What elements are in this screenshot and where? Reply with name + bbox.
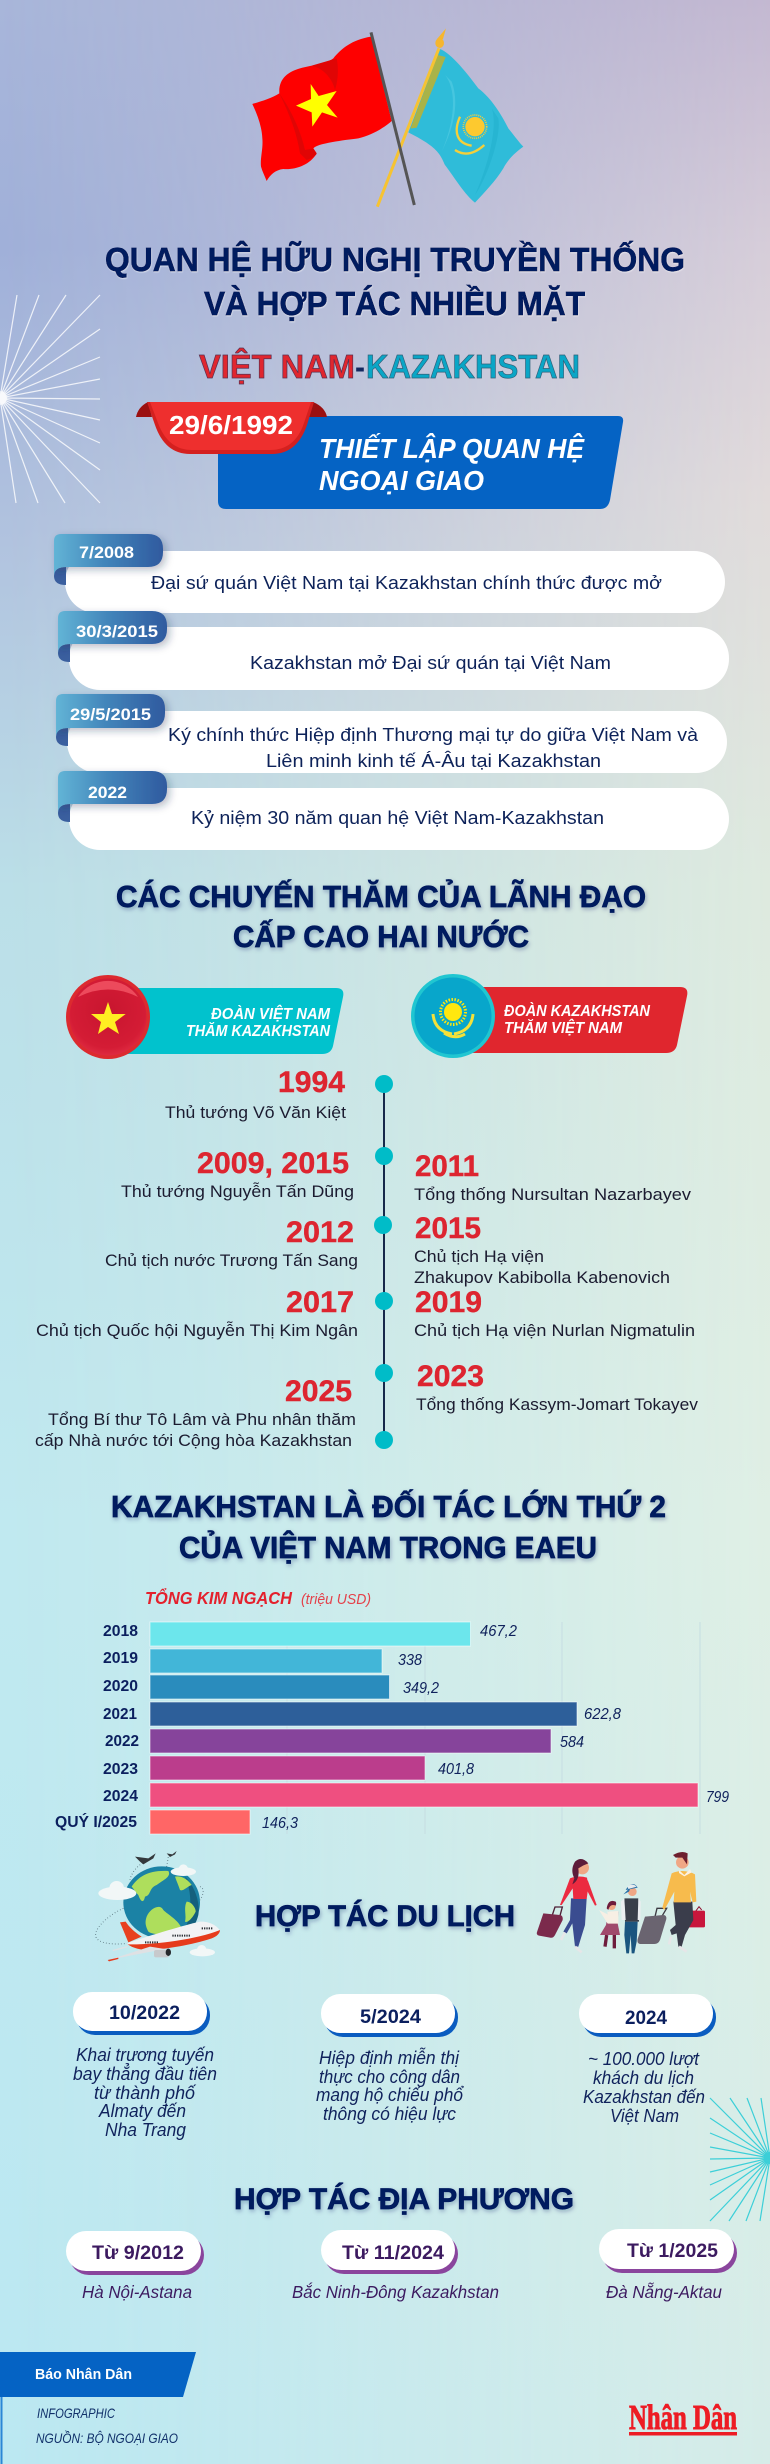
value labels xyxy=(262,1623,729,1832)
heading: high-level visits xyxy=(116,878,646,954)
icon: dark pole xyxy=(371,32,414,205)
heading: local cooperation: HỢP TÁC ĐỊA PHƯƠNG xyxy=(234,2182,574,2216)
description: Khai trương tuyến xyxy=(76,2044,214,2065)
heading: EAEU partner: KAZAKHSTAN LÀ ĐỐI TÁC LỚN THỨ 2 xyxy=(111,1488,666,1524)
visit 2011: 2011 xyxy=(415,1150,479,1183)
visit 2019 xyxy=(414,1286,695,1340)
panel: milestone 2022: Kỷ niệm 30 năm quan hệ Việt Nam-Kazakhstan xyxy=(191,808,604,828)
panel: local Đà Nẵng-Aktau: Đà Nẵng-Aktau xyxy=(606,2282,722,2302)
description xyxy=(583,2048,705,2126)
title xyxy=(105,240,685,322)
description: mang hộ chiếu phổ xyxy=(316,2084,465,2105)
icon: Vietnam flag xyxy=(252,37,392,181)
heading: EAEU partner: CỦA VIỆT NAM TRONG EAEU xyxy=(179,1529,597,1565)
visit 2015: Zhakupov Kabibolla Kabenovich xyxy=(414,1268,670,1287)
bars xyxy=(150,1622,698,1834)
visit 2023: Tổng thống Kassym-Jomart Tokayev xyxy=(416,1395,699,1414)
panel: Vietnam delegation header: THĂM KAZAKHSTAN xyxy=(186,1023,331,1040)
panel: tourism 2024 xyxy=(579,1994,716,2126)
description: khách du lịch xyxy=(593,2067,694,2088)
panel: Vietnam delegation header: ĐOÀN VIỆT NAM xyxy=(211,1005,331,1023)
footer credits: Báo Nhân Dân xyxy=(35,2366,132,2383)
panel: tourism 5/2024 xyxy=(316,1994,465,2124)
visit 2019: Chủ tịch Hạ viện Nurlan Nigmatulin xyxy=(414,1321,695,1340)
value labels: 622,8 xyxy=(584,1706,621,1723)
value labels: 349,2 xyxy=(403,1680,439,1697)
description: Hiệp định miễn thị xyxy=(319,2047,460,2068)
value labels: 799 xyxy=(706,1789,729,1806)
timeline axis xyxy=(374,1075,393,1449)
panel: local Hà Nội-Astana xyxy=(66,2231,204,2302)
chart title: (triệu USD) xyxy=(301,1591,371,1608)
icon: Vietnam badge xyxy=(66,975,150,1059)
panel: milestone 30/3/2015 xyxy=(58,611,729,690)
visit 2012: 2012 xyxy=(286,1216,354,1249)
title: VÀ HỢP TÁC NHIỀU MẶT xyxy=(204,285,585,322)
visit 2011: Tổng thống Nursultan Nazarbayev xyxy=(414,1185,692,1204)
description: thực cho công dân xyxy=(319,2066,460,2087)
icon: globe and airplane xyxy=(96,1851,220,1961)
visit 2023: 2023 xyxy=(417,1360,484,1393)
panel: Kazakhstan delegation header xyxy=(411,974,687,1058)
panel: milestone 30/3/2015: 30/3/2015 xyxy=(76,622,158,641)
panel: milestone 30/3/2015: Kazakhstan mở Đại sứ quán tại Việt Nam xyxy=(250,653,611,673)
chart title: TỔNG KIM NGẠCH xyxy=(145,1587,292,1608)
panel: milestone 29/5/2015 xyxy=(56,694,727,773)
visit 2009, 2015: Thủ tướng Nguyễn Tấn Dũng xyxy=(121,1182,354,1201)
visit 2015 xyxy=(414,1212,670,1287)
visit 2017: 2017 xyxy=(286,1286,354,1319)
footer credits: INFOGRAPHIC xyxy=(37,2405,116,2421)
bar chart: total trade xyxy=(55,1622,729,1834)
heading: high-level visits: CẤP CAO HAI NƯỚC xyxy=(233,918,529,954)
description: Việt Nam xyxy=(610,2105,679,2126)
icon: firework burst left xyxy=(0,295,100,503)
icon: crossed flags xyxy=(252,28,523,207)
visit 2011 xyxy=(414,1150,692,1204)
visit 2009, 2015: 2009, 2015 xyxy=(197,1147,349,1180)
visit 2017: Chủ tịch Quốc hội Nguyễn Thị Kim Ngân xyxy=(36,1321,358,1340)
heading: EAEU partner xyxy=(111,1488,666,1565)
subtitle: Việt Nam-Kazakhstan xyxy=(199,348,580,385)
panel: local Đà Nẵng-Aktau xyxy=(599,2229,737,2302)
value labels: 338 xyxy=(398,1652,422,1669)
visit 2019: 2019 xyxy=(415,1286,482,1319)
panel: milestone 29/5/2015: Liên minh kinh tế Á-Âu tại Kazakhstan xyxy=(266,751,601,771)
girl xyxy=(599,1901,620,1948)
visit 2023 xyxy=(416,1360,699,1414)
year labels: 2022 xyxy=(105,1733,139,1750)
Vietnam visits list xyxy=(35,1066,358,1450)
panel: Vietnam delegation header xyxy=(66,975,343,1059)
visit 2025: 2025 xyxy=(285,1375,352,1408)
year labels: QUÝ I/2025 xyxy=(55,1813,137,1831)
subtitle: Việt Nam-Kazakhstan: KAZAKHSTAN xyxy=(366,348,580,385)
man with bag xyxy=(662,1852,705,1952)
year labels: 2023 xyxy=(103,1761,138,1778)
panel: tourism 2024: 2024 xyxy=(625,2008,667,2029)
panel: tourism 5/2024: 5/2024 xyxy=(360,2007,421,2028)
visit 2025 xyxy=(35,1375,356,1450)
panel: Kazakhstan delegation header: ĐOÀN KAZAKHSTAN xyxy=(504,1003,651,1020)
visit 2012: Chủ tịch nước Trương Tấn Sang xyxy=(105,1251,358,1270)
value labels: 401,8 xyxy=(438,1761,474,1778)
red date ribbon: 29/6/1992 xyxy=(169,410,293,440)
panel: local Bắc Ninh-Đông Kazakhstan: Bắc Ninh-Đông Kazakhstan xyxy=(292,2282,499,2302)
panel: establishment of diplomatic relations xyxy=(136,402,623,509)
year labels: 2024 xyxy=(103,1788,138,1805)
visit 2025: cấp Nhà nước tới Cộng hòa Kazakhstan xyxy=(35,1431,352,1450)
panel: milestone 2022: 2022 xyxy=(88,783,127,802)
panel: milestone 7/2008: 7/2008 xyxy=(79,543,134,562)
chart title xyxy=(145,1587,371,1608)
woman with suitcase xyxy=(537,1859,597,1952)
value labels: 467,2 xyxy=(480,1623,517,1640)
footer credits: NGUỒN: BỘ NGOẠI GIAO xyxy=(36,2429,178,2446)
description xyxy=(316,2047,465,2124)
description: từ thành phố xyxy=(94,2082,197,2103)
footer credits xyxy=(0,2352,196,2464)
value labels: 584 xyxy=(560,1734,584,1751)
description: bay thẳng đầu tiên xyxy=(73,2063,217,2084)
panel: local Hà Nội-Astana: Từ 9/2012 xyxy=(92,2243,184,2264)
year labels: 2021 xyxy=(103,1706,137,1723)
panel: Kazakhstan delegation header: THĂM VIỆT NAM xyxy=(504,1019,623,1037)
panel: tourism 10/2022: 10/2022 xyxy=(109,2003,180,2024)
Kazakhstan visits list xyxy=(414,1150,699,1414)
description: ~ 100.000 lượt xyxy=(588,2048,700,2069)
visit 2025: Tổng Bí thư Tô Lâm và Phu nhân thăm xyxy=(48,1410,356,1429)
subtitle: Việt Nam-Kazakhstan: - xyxy=(355,348,365,385)
panel: local Bắc Ninh-Đông Kazakhstan xyxy=(292,2230,499,2302)
visit 1994 xyxy=(165,1066,346,1122)
blue box xyxy=(218,416,623,509)
visit 2015: Chủ tịch Hạ viện xyxy=(414,1247,544,1266)
panel: milestone 2022 xyxy=(58,771,729,850)
panel: milestone 7/2008: Đại sứ quán Việt Nam tại Kazakhstan chính thức được mở xyxy=(151,573,662,593)
icon: Kazakhstan flag xyxy=(408,49,523,203)
visit 1994: Thủ tướng Võ Văn Kiệt xyxy=(165,1103,346,1122)
panel: milestone 7/2008 xyxy=(54,534,725,613)
heading in blue box: NGOẠI GIAO xyxy=(319,465,484,496)
visit 2009, 2015 xyxy=(121,1147,354,1201)
icon: firework burst right xyxy=(710,2098,770,2221)
panel: local Hà Nội-Astana: Hà Nội-Astana xyxy=(82,2282,192,2302)
year labels: 2020 xyxy=(103,1678,138,1695)
visit 2012 xyxy=(105,1216,358,1270)
subtitle: Việt Nam-Kazakhstan: VIỆT NAM xyxy=(199,348,355,385)
visit 2015: 2015 xyxy=(415,1212,481,1245)
icon: travelling family xyxy=(537,1852,705,1953)
value labels: 146,3 xyxy=(262,1815,298,1832)
heading: high-level visits: CÁC CHUYẾN THĂM CỦA LÃNH ĐẠO xyxy=(116,878,646,914)
heading in blue box xyxy=(319,433,585,496)
title: QUAN HỆ HỮU NGHỊ TRUYỀN THỐNG xyxy=(105,240,685,278)
icon: Kazakhstan badge xyxy=(411,974,495,1058)
boy with suitcase xyxy=(621,1884,667,1953)
year labels: 2018 xyxy=(103,1623,138,1640)
year labels: 2019 xyxy=(103,1650,138,1667)
panel: milestone 29/5/2015: 29/5/2015 xyxy=(70,705,151,724)
panel: local Bắc Ninh-Đông Kazakhstan: Từ 11/2024 xyxy=(342,2243,444,2264)
panel: tourism 10/2022 xyxy=(73,1992,217,2140)
heading: tourism cooperation: HỢP TÁC DU LỊCH xyxy=(255,1899,515,1933)
description: Nha Trang xyxy=(105,2119,187,2140)
heading in blue box: THIẾT LẬP QUAN HỆ xyxy=(319,433,585,464)
description: Kazakhstan đến xyxy=(583,2086,705,2107)
visit 1994: 1994 xyxy=(278,1066,345,1099)
description xyxy=(73,2044,217,2140)
panel: local Đà Nẵng-Aktau: Từ 1/2025 xyxy=(627,2241,718,2262)
description: thông có hiệu lực xyxy=(323,2103,457,2124)
panel: milestone 29/5/2015: Ký chính thức Hiệp định Thương mại tự do giữa Việt Nam và xyxy=(168,725,699,745)
year labels xyxy=(55,1623,139,1831)
visit 2017 xyxy=(36,1286,358,1340)
red date ribbon xyxy=(136,402,327,454)
description: Almaty đến xyxy=(98,2100,186,2121)
icon: gold pole xyxy=(377,28,446,207)
